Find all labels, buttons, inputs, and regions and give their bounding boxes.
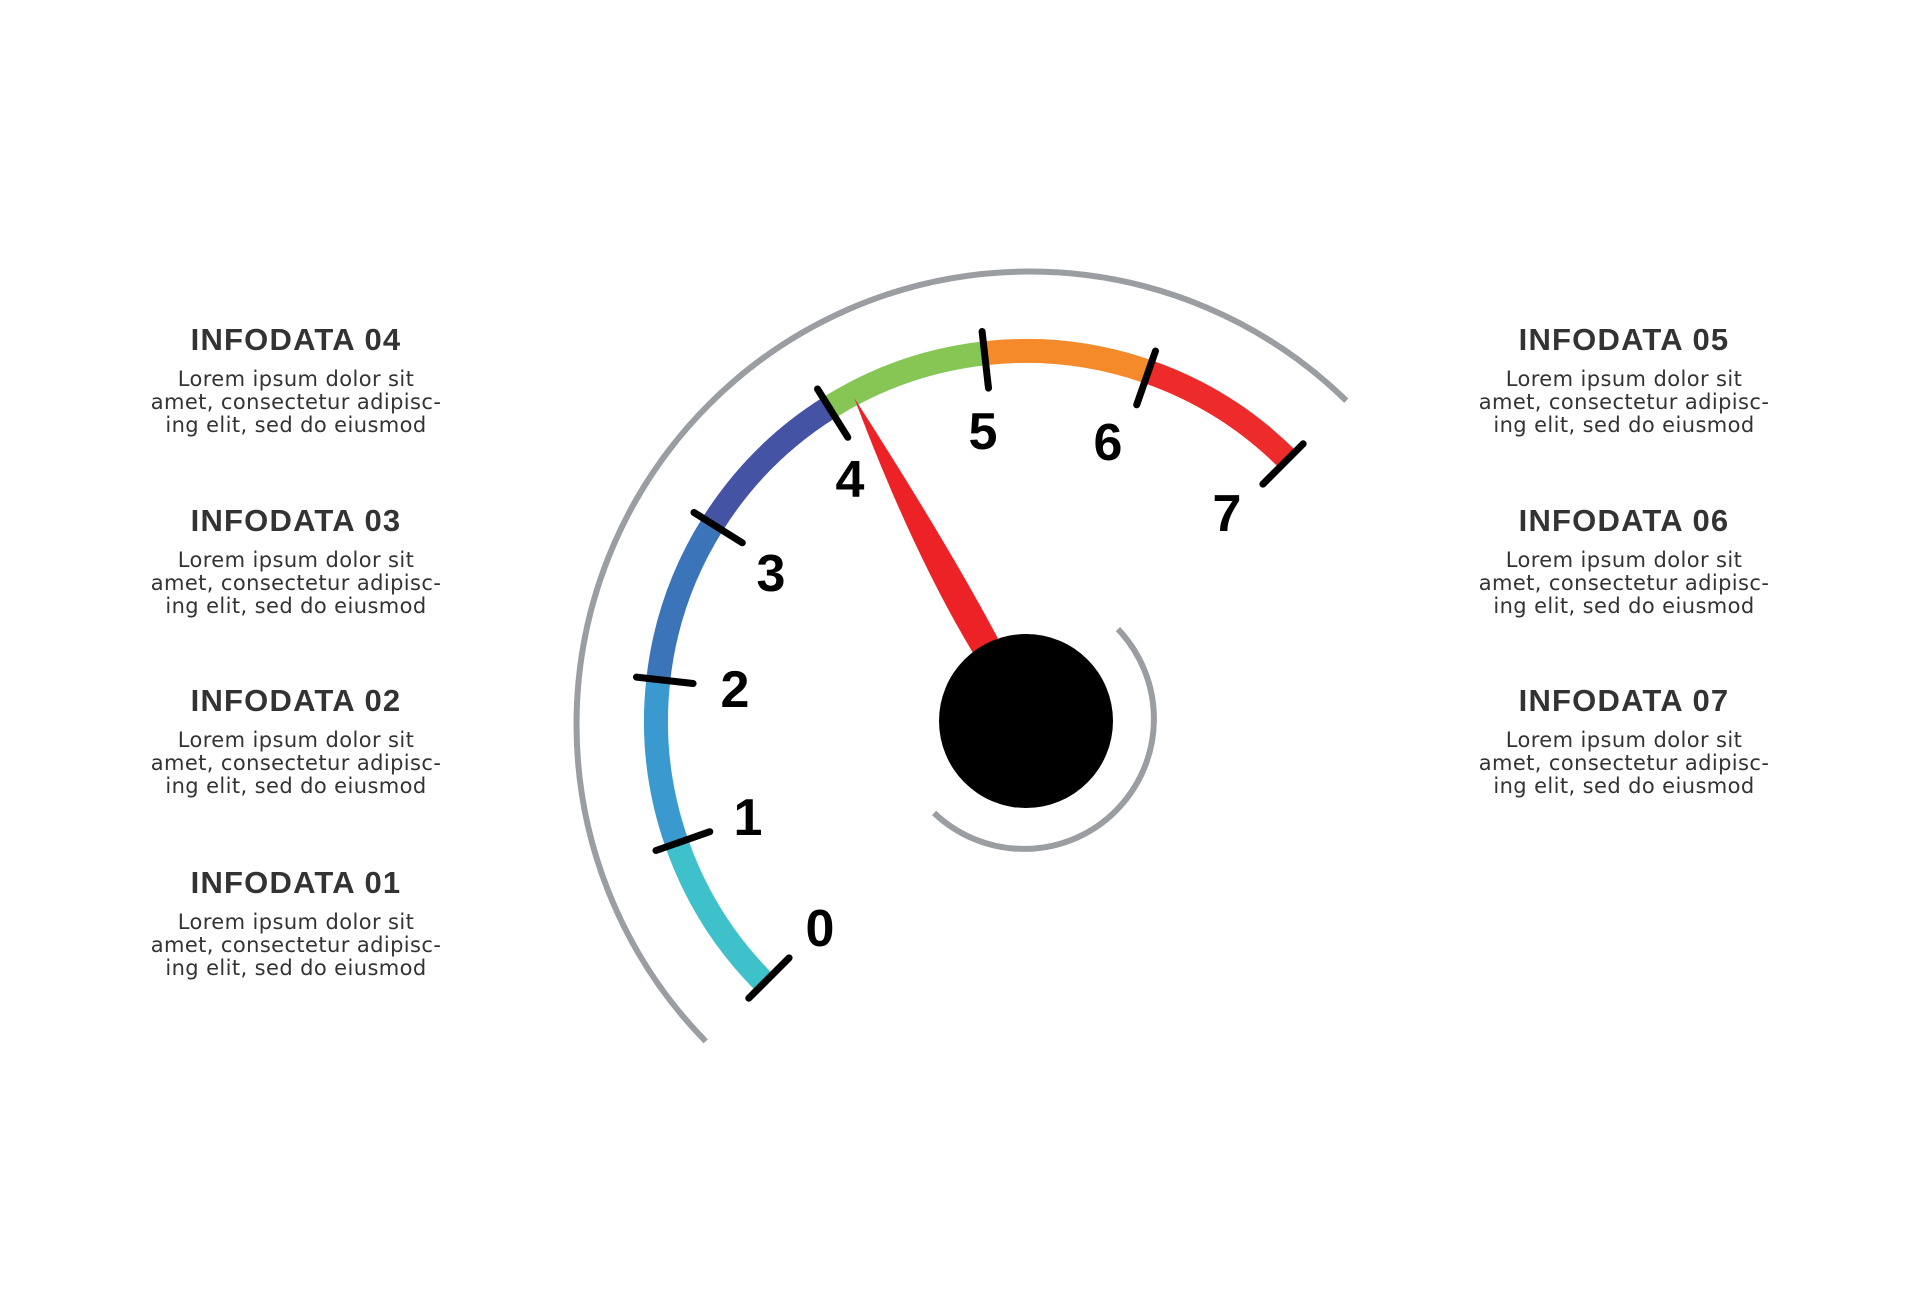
infodata 06: INFODATA 06 (1519, 503, 1729, 538)
infodata 04: INFODATA 04 (191, 322, 401, 357)
infodata 05: INFODATA 05 (1519, 322, 1729, 357)
infodata 03 (151, 503, 441, 618)
infodata 07: Lorem ipsum dolor sit (1506, 728, 1742, 752)
infodata 04: ing elit, sed do eiusmod (165, 413, 427, 437)
colored scale arc (656, 351, 1288, 983)
scale numbers: 2 (721, 661, 749, 719)
tick marks (636, 332, 1303, 998)
needle (854, 398, 1005, 666)
infodata 07: ing elit, sed do eiusmod (1493, 774, 1755, 798)
infodata 03: INFODATA 03 (191, 503, 401, 538)
infodata 03: amet, consectetur adipisc- (151, 571, 441, 595)
infodata 04 (151, 322, 441, 437)
infodata 02: INFODATA 02 (191, 683, 401, 718)
infodata 02: ing elit, sed do eiusmod (165, 774, 427, 798)
infodata 06: amet, consectetur adipisc- (1479, 571, 1769, 595)
infodata 06 (1479, 503, 1769, 618)
infodata 05 (1479, 322, 1769, 437)
scale numbers (721, 403, 1241, 958)
infodata 07: amet, consectetur adipisc- (1479, 751, 1769, 775)
infodata 01: INFODATA 01 (191, 865, 401, 900)
infodata 07 (1479, 683, 1769, 798)
scale numbers: 5 (969, 403, 997, 461)
infodata 01: ing elit, sed do eiusmod (165, 956, 427, 980)
infodata 07: INFODATA 07 (1519, 683, 1729, 718)
scale numbers: 4 (836, 451, 865, 509)
infodata 04: amet, consectetur adipisc- (151, 390, 441, 414)
infodata 02: Lorem ipsum dolor sit (178, 728, 414, 752)
scale numbers: 7 (1213, 485, 1241, 543)
infodata 05: amet, consectetur adipisc- (1479, 390, 1769, 414)
infodata 06: ing elit, sed do eiusmod (1493, 594, 1755, 618)
infodata 02 (151, 683, 441, 798)
infodata 01 (151, 865, 441, 980)
infodata 01: amet, consectetur adipisc- (151, 933, 441, 957)
scale numbers: 3 (757, 545, 785, 603)
infodata 06: Lorem ipsum dolor sit (1506, 548, 1742, 572)
infodata 01: Lorem ipsum dolor sit (178, 910, 414, 934)
hub circle (939, 634, 1113, 808)
infodata 02: amet, consectetur adipisc- (151, 751, 441, 775)
outer gray arc (577, 272, 1346, 1041)
scale numbers: 0 (806, 900, 834, 958)
infodata 04: Lorem ipsum dolor sit (178, 367, 414, 391)
inner gray arc (934, 629, 1154, 849)
infodata 05: Lorem ipsum dolor sit (1506, 367, 1742, 391)
scale numbers: 6 (1094, 414, 1122, 472)
scale numbers: 1 (734, 789, 762, 847)
infodata 03: Lorem ipsum dolor sit (178, 548, 414, 572)
infodata 03: ing elit, sed do eiusmod (165, 594, 427, 618)
infodata 05: ing elit, sed do eiusmod (1493, 413, 1755, 437)
